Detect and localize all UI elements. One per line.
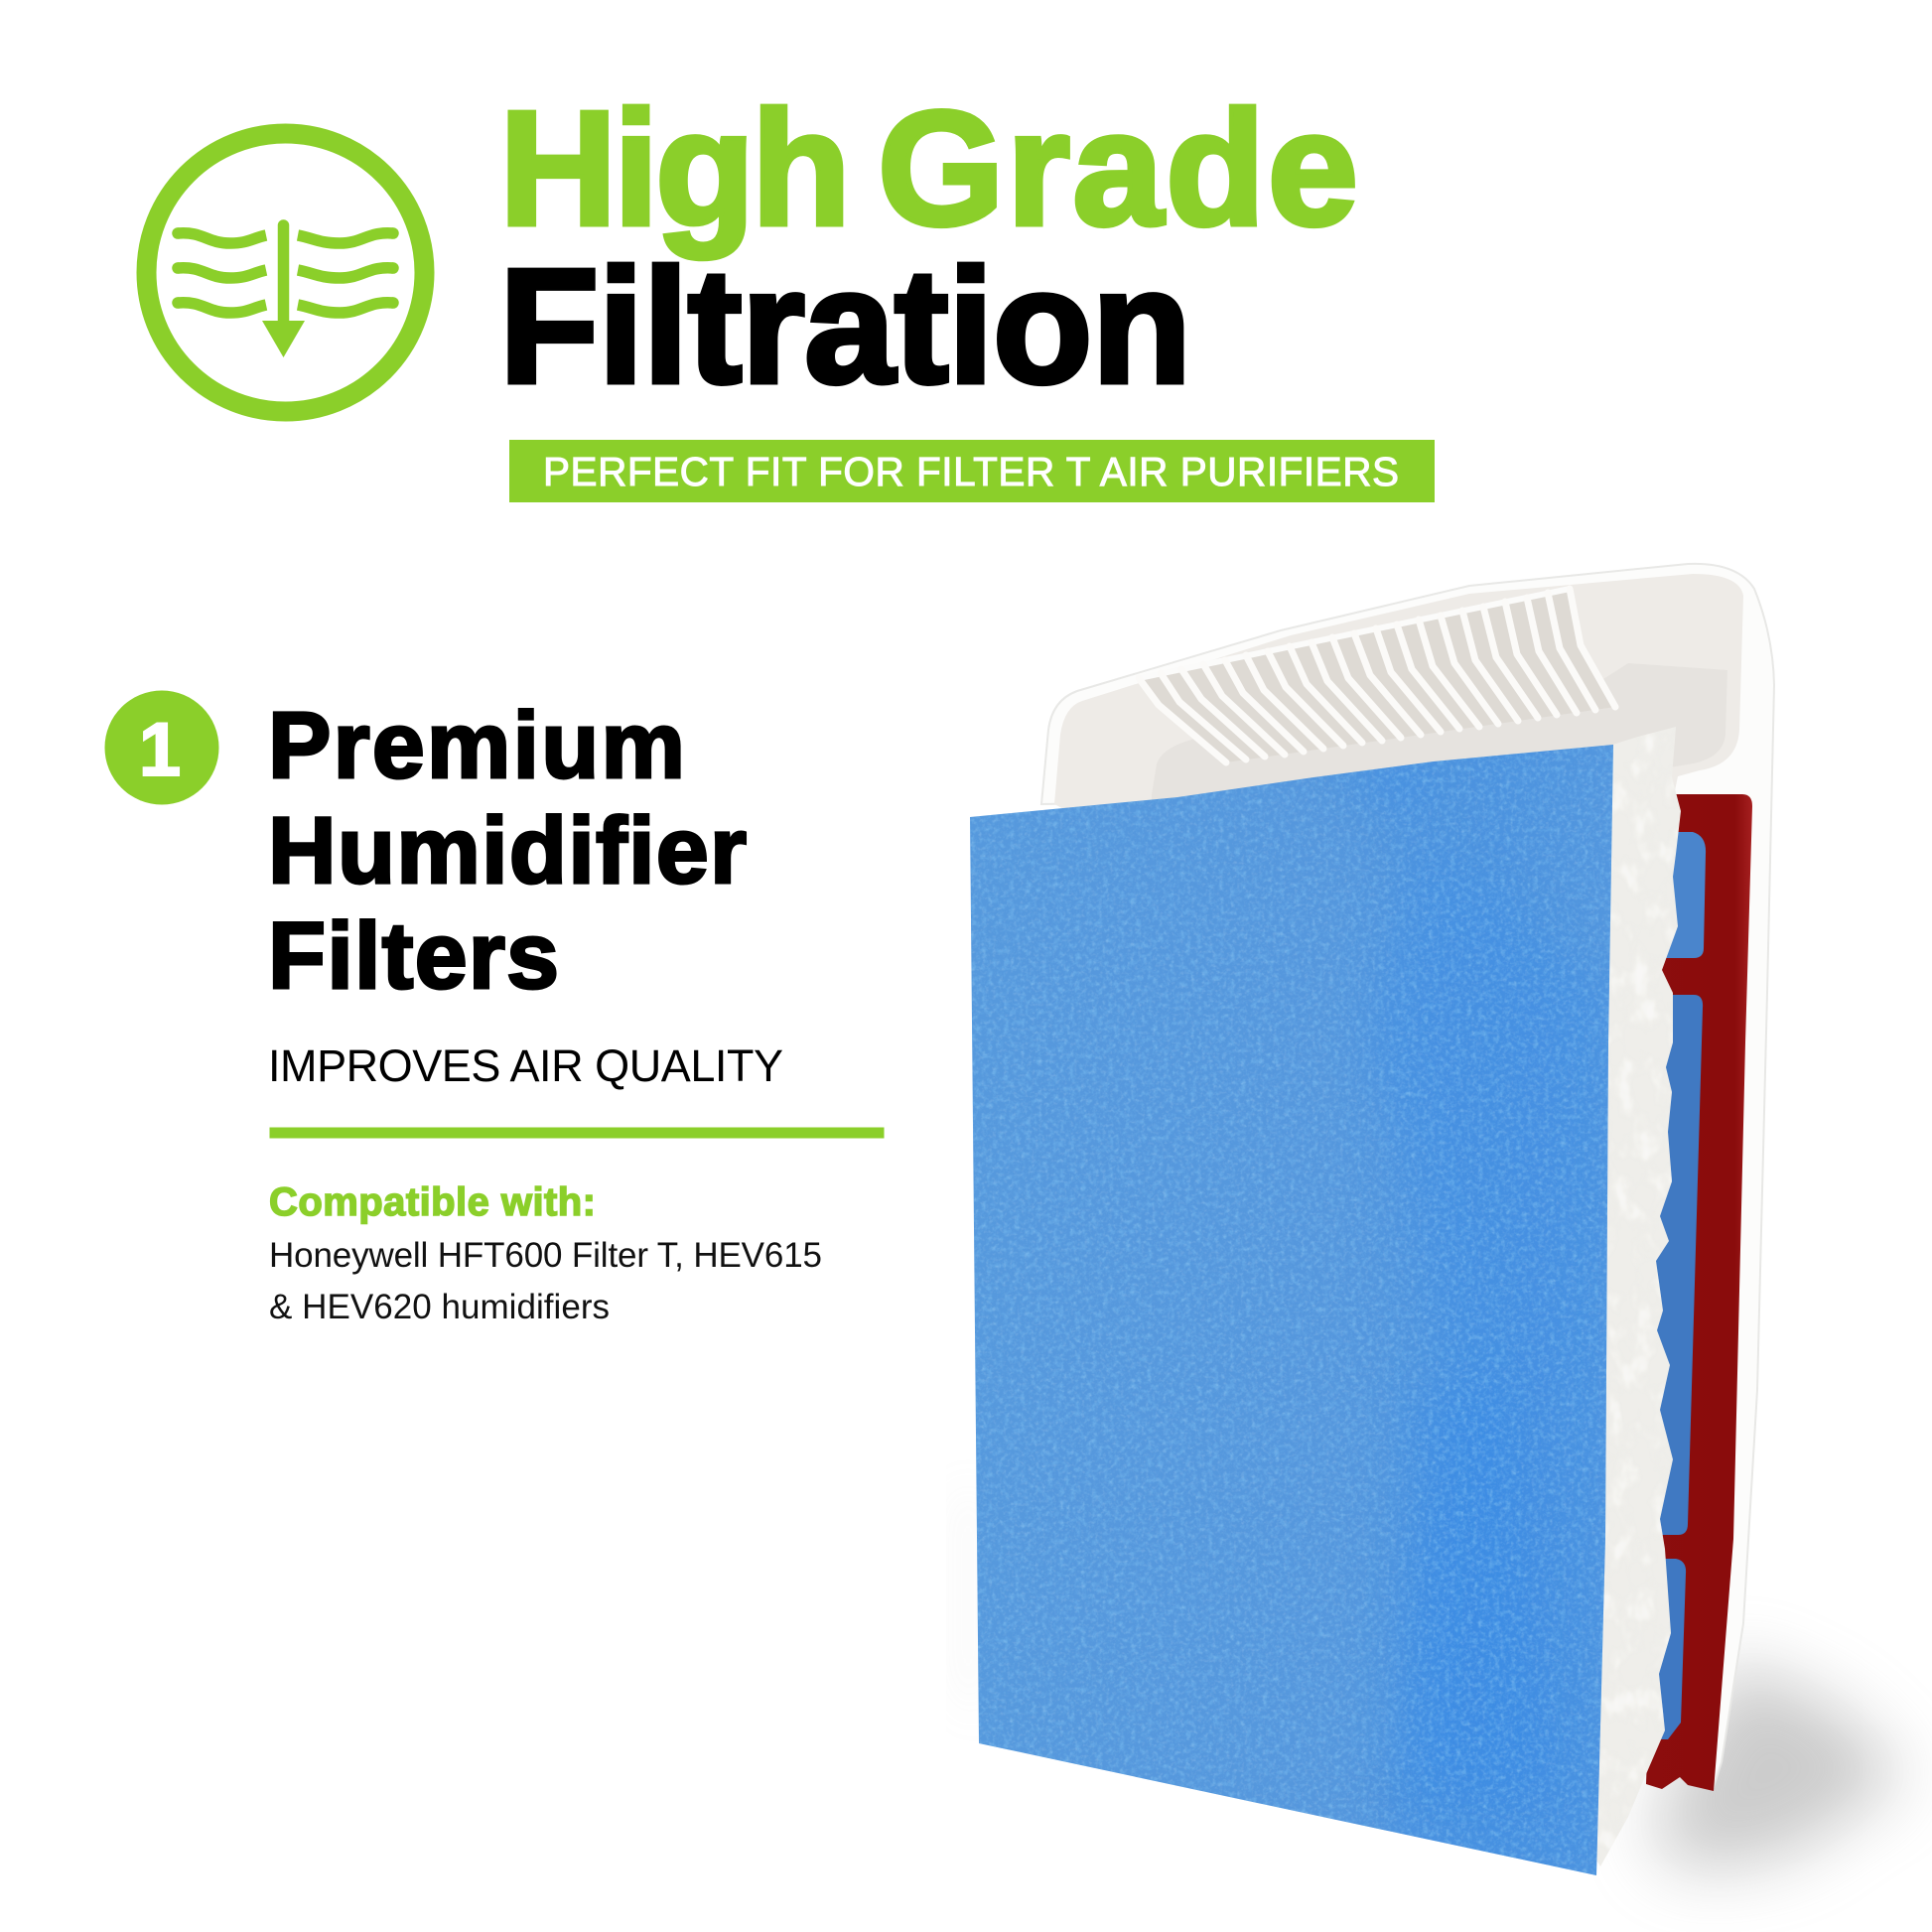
heading: Premium Humidifier Filters: Premium [268,693,685,798]
compatible with label: Compatible with: [269,1180,596,1224]
banner: perfect fit: PERFECT FIT FOR FILTER T AIR PURIFIERS [543,449,1399,494]
product: filter in humidifier housing [958,564,1906,1886]
banner: perfect fit [509,440,1435,502]
compatibility text: Honeywell HFT600 Filter T, HEV615 [269,1236,822,1275]
tray recess [1152,663,1727,824]
subheading: improves air quality: IMPROVES AIR QUALITY [268,1040,783,1091]
blue window: top [1648,832,1706,958]
housing body [1041,564,1774,1787]
blue window: bottom [1638,1559,1686,1739]
comb fins [1139,589,1615,762]
heading: High Grade: Grade [878,77,1358,259]
floor shadow [958,1489,1906,1871]
divider line [270,1128,884,1138]
heading: High Grade: High [499,77,851,259]
housing tray interior [1054,574,1743,824]
heading: Premium Humidifier Filters: Humidifier [268,798,747,903]
blue window: middle [1638,995,1703,1535]
badge: number 1 [105,691,218,804]
heading: High Grade [499,77,1358,259]
heading: Filtration: Filtration [499,235,1191,417]
badge: number 1: 1 [139,708,181,792]
icon: filtration circle with waves and down arrow [147,133,425,411]
compatibility text [269,1236,822,1326]
heading: Premium Humidifier Filters [268,693,747,1009]
red frame [1638,794,1752,1791]
heading: Premium Humidifier Filters: Filters [268,903,559,1009]
compatibility text: & HEV620 humidifiers [269,1288,610,1326]
blue filter face [963,735,1628,1886]
white pleated media [1596,727,1681,1866]
